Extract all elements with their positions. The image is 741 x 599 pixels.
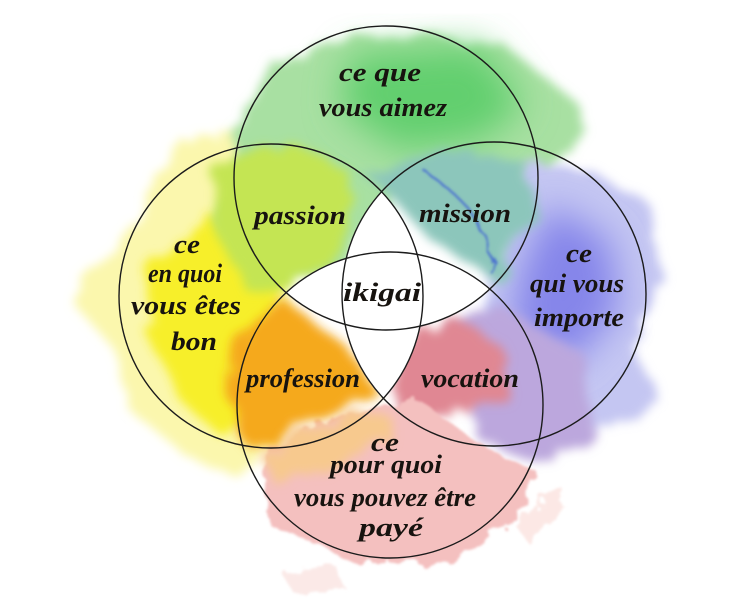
- petal: horizontal lens: [347, 192, 419, 397]
- label: ce pour quoi vous pouvez etre paye: vous pouvez être: [294, 483, 476, 512]
- labels: [131, 58, 624, 542]
- label: passion: passion: [252, 201, 346, 230]
- petal: vertical lens: [287, 260, 488, 325]
- label: ce qui vous importe: [530, 239, 624, 332]
- label: ce en quoi vous etes bon: [131, 230, 241, 356]
- wash: lime passion: [215, 145, 352, 290]
- label: ce que vous aimez: vous aimez: [319, 93, 448, 122]
- wash: pale pink right: [515, 485, 562, 545]
- wash: blue vein: [425, 172, 493, 275]
- label: ce en quoi vous etes bon: vous êtes: [131, 291, 241, 320]
- label: ce que vous aimez: ce que: [339, 58, 421, 87]
- wash: teal mission: [365, 150, 535, 280]
- label: vocation: vocation: [421, 364, 519, 393]
- ikigai venn diagram: [69, 20, 669, 596]
- circle outlines: [119, 26, 646, 558]
- wash: pale pink streak: [280, 565, 345, 594]
- circle: bottom: [237, 252, 543, 558]
- wash: peach: [265, 410, 395, 480]
- label: ce qui vous importe: ce: [566, 239, 592, 268]
- label: ikigai: ikigai: [343, 278, 422, 307]
- label: ce en quoi vous etes bon: bon: [171, 327, 217, 356]
- circle: right: [342, 142, 646, 446]
- label: ce qui vous importe: importe: [534, 303, 624, 332]
- circle: left: [119, 144, 423, 448]
- label: ce pour quoi vous pouvez etre paye: ce: [371, 428, 399, 457]
- wash: pale violet: [480, 160, 660, 428]
- label: profession: profession: [244, 364, 360, 393]
- white central petals: [237, 142, 646, 558]
- label: ce qui vous importe: qui vous: [530, 269, 624, 298]
- circle: top: [234, 26, 538, 330]
- label: ce en quoi vous etes bon: en quoi: [148, 259, 223, 288]
- label: mission: mission: [419, 199, 511, 228]
- label: ce que vous aimez: [319, 58, 448, 122]
- wash: lilac lower right: [440, 305, 590, 465]
- wash: strong green top: [340, 45, 525, 150]
- wash: strong blue: [510, 205, 620, 365]
- label: ce en quoi vous etes bon: ce: [174, 230, 200, 259]
- wash: pale yellow outer: [70, 135, 290, 478]
- label: ce pour quoi vous pouvez etre paye: pour quoi: [328, 450, 443, 479]
- watercolor background: [70, 32, 660, 594]
- wash: pale green top: [225, 32, 590, 280]
- label: ce pour quoi vous pouvez etre paye: [294, 428, 476, 542]
- wash: pink bottom: [262, 400, 535, 565]
- wash: orange: [228, 300, 380, 445]
- label: ce pour quoi vous pouvez etre paye: payé: [356, 513, 425, 542]
- wash: red vocation: [395, 310, 510, 420]
- wash: yellow: [145, 215, 280, 440]
